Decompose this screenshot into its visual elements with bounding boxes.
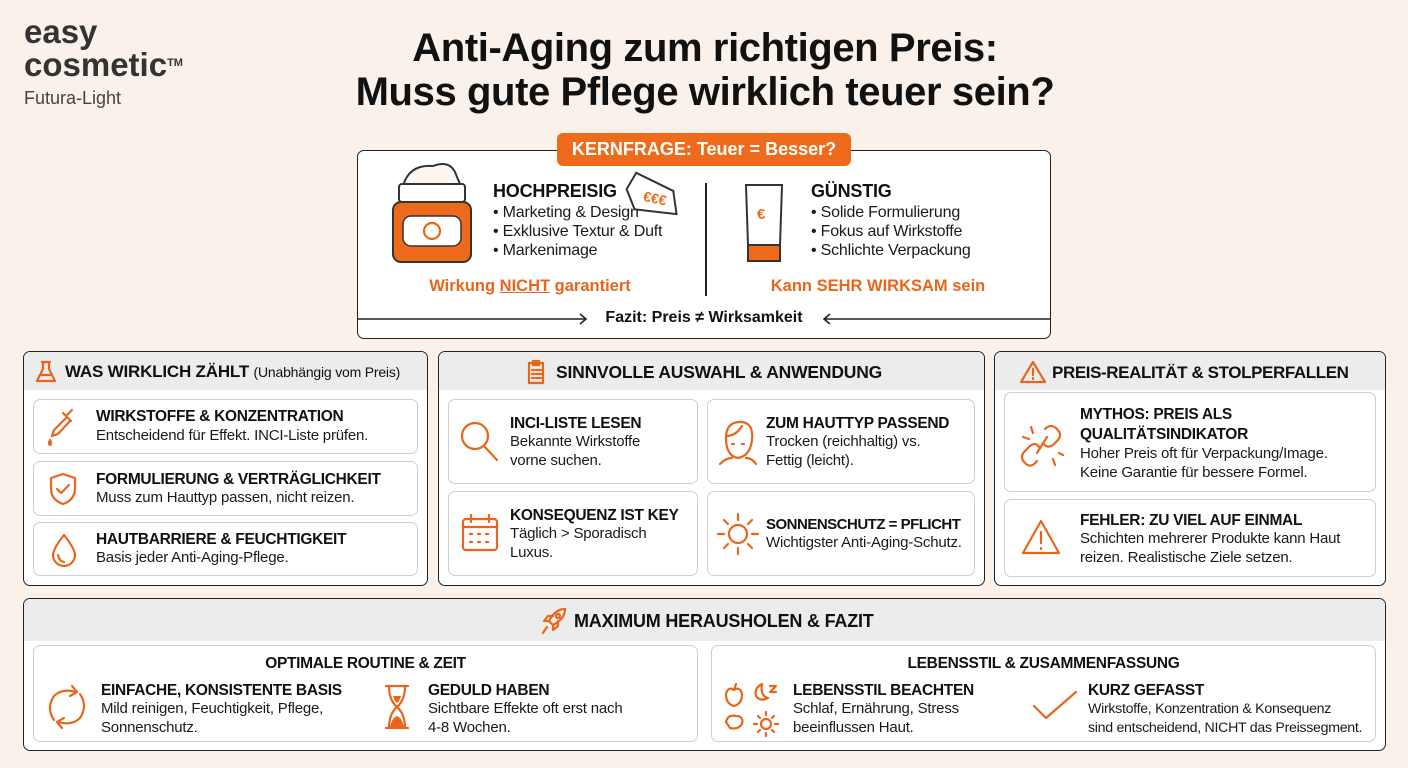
box: optimale routine: Sonnenschutz. <box>101 718 198 736</box>
card: mythos <box>1004 392 1376 492</box>
logo: Futura-Light <box>24 88 121 108</box>
box: lebensstil <box>711 645 1376 742</box>
card: hauttyp: ZUM HAUTTYP PASSEND <box>766 415 949 432</box>
card: hauttyp: Fettig (leicht). <box>766 452 854 468</box>
card: inci: Bekannte Wirkstoffe <box>510 433 640 450</box>
list: günstig: • Fokus auf Wirkstoffe <box>811 223 962 240</box>
panel: maximum herausholen <box>23 598 1386 751</box>
list: günstig <box>811 204 971 259</box>
card: hautbarriere: HAUTBARRIERE & FEUCHTIGKEIT <box>96 531 346 548</box>
card: sonnenschutz <box>707 491 975 576</box>
box: lebensstil: Wirkstoffe, Konzentration & Konsequenz <box>1088 701 1331 717</box>
card: sonnenschutz: SONNENSCHUTZ = PFLICHT <box>766 516 960 533</box>
list: hochpreisig: • Marketing & Design <box>493 204 639 221</box>
card: wirkstoffe: Entscheidend für Effekt. INCI-Liste prüfen. <box>96 427 368 444</box>
arrow: fazit: Fazit: Preis ≠ Wirksamkeit <box>605 309 803 326</box>
box: lebensstil: sind entscheidend, NICHT das Preissegment. <box>1088 720 1362 736</box>
icon: check <box>1032 690 1078 720</box>
card: hautbarriere <box>33 522 418 576</box>
list: hochpreisig: • Exklusive Textur & Duft <box>493 223 662 240</box>
icon: price tag <box>626 172 678 216</box>
box: optimale routine: OPTIMALE ROUTINE & ZEIT <box>265 655 466 672</box>
badge: kernfrage <box>557 133 851 166</box>
callout: kann sehr wirksam sein: Kann SEHR WIRKSAM sein <box>771 277 985 295</box>
card: inci: INCI-LISTE LESEN <box>510 415 641 432</box>
title: Anti-Aging zum richtigen Preis: <box>412 26 998 70</box>
card: konsequenz <box>448 491 698 576</box>
card: hauttyp: Trocken (reichhaltig) vs. <box>766 433 920 450</box>
card: formulierung: Muss zum Hauttyp passen, nicht reizen. <box>96 489 354 506</box>
box: optimale routine: GEDULD HABEN <box>428 682 549 699</box>
card: hauttyp <box>707 399 975 484</box>
card: konsequenz: Täglich > Sporadisch <box>510 525 646 542</box>
panel: kernfrage comparison <box>357 150 1051 339</box>
icon: rocket <box>542 608 566 634</box>
icon: price tag: €€€ <box>642 188 668 209</box>
card: fehler: reizen. Realistische Ziele setzen. <box>1080 548 1292 566</box>
card: sonnenschutz: Wichtigster Anti-Aging-Schutz. <box>766 534 962 551</box>
box: lebensstil: KURZ GEFASST <box>1088 682 1204 699</box>
icon: flask <box>36 360 56 382</box>
card: fehler <box>1004 499 1376 577</box>
card: formulierung <box>33 461 418 516</box>
arrow: fazit <box>358 309 1050 326</box>
box: optimale routine: Mild reinigen, Feuchtigkeit, Pflege, <box>101 700 323 717</box>
card: inci: vorne suchen. <box>510 452 602 468</box>
card: konsequenz: KONSEQUENZ IST KEY <box>510 507 679 524</box>
callout: wirkung nicht garantiert: Wirkung NICHT garantiert <box>429 277 631 295</box>
icon: cycle <box>48 684 86 730</box>
card: mythos: Keine Garantie für bessere Formel. <box>1080 464 1307 480</box>
card: formulierung: FORMULIERUNG & VERTRÄGLICHKEIT <box>96 471 381 488</box>
list: günstig: • Schlichte Verpackung <box>811 242 971 259</box>
card: fehler: FEHLER: ZU VIEL AUF EINMAL <box>1080 512 1302 529</box>
card: mythos: QUALITÄTSINDIKATOR <box>1080 426 1248 442</box>
title: Muss gute Pflege wirklich teuer sein? <box>356 70 1054 114</box>
card: fehler: Schichten mehrerer Produkte kann Haut <box>1080 530 1340 547</box>
list: günstig: • Solide Formulierung <box>811 204 960 221</box>
card: hautbarriere: Basis jeder Anti-Aging-Pflege. <box>96 549 288 566</box>
box: lebensstil: Schlaf, Ernährung, Stress <box>793 700 959 717</box>
card: wirkstoffe: WIRKSTOFFE & KONZENTRATION <box>96 408 343 425</box>
divider <box>705 183 707 296</box>
icon: clipboard <box>528 360 544 384</box>
box: optimale routine: Sichtbare Effekte oft erst nach <box>428 700 622 717</box>
heading: WAS WIRKLICH ZÄHLT (Unabhängig vom Preis) <box>65 362 400 381</box>
card: wirkstoffe <box>33 399 418 454</box>
box: lebensstil: LEBENSSTIL BEACHTEN <box>793 682 974 699</box>
heading: günstig: GÜNSTIG <box>811 181 892 201</box>
icon: tube: € <box>757 206 766 223</box>
panel: preis-realität <box>994 351 1386 586</box>
title <box>356 26 1054 114</box>
logo: cosmeticTM <box>24 46 183 83</box>
card: inci <box>448 399 698 484</box>
heading: PREIS-REALITÄT & STOLPERFALLEN <box>1052 363 1349 382</box>
card: konsequenz: Luxus. <box>510 544 553 560</box>
box: optimale routine <box>33 645 698 742</box>
list: hochpreisig <box>493 204 662 259</box>
box: lebensstil: beeinflussen Haut. <box>793 718 914 736</box>
badge: kernfrage: KERNFRAGE: Teuer = Besser? <box>572 139 836 159</box>
logo <box>24 13 183 108</box>
card: mythos: MYTHOS: PREIS ALS <box>1080 406 1232 423</box>
heading: MAXIMUM HERAUSHOLEN & FAZIT <box>574 611 874 631</box>
icon: lifestyle <box>724 682 780 738</box>
box: lebensstil: LEBENSSTIL & ZUSAMMENFASSUNG <box>907 655 1180 672</box>
panel: sinnvolle auswahl <box>438 351 985 586</box>
icon: hourglass <box>384 684 410 730</box>
icon: cream jar <box>392 163 472 263</box>
icon: tube <box>744 184 784 262</box>
panel: was wirklich zählt <box>23 351 428 586</box>
logo: easy <box>24 13 97 50</box>
card: mythos: Hoher Preis oft für Verpackung/Image. <box>1080 445 1328 462</box>
box: optimale routine: EINFACHE, KONSISTENTE BASIS <box>101 682 342 699</box>
heading: hochpreisig: HOCHPREISIG <box>493 181 617 201</box>
icon: warning <box>1020 360 1046 384</box>
list: hochpreisig: • Markenimage <box>493 242 597 259</box>
box: optimale routine: 4-8 Wochen. <box>428 718 511 736</box>
heading: SINNVOLLE AUSWAHL & ANWENDUNG <box>556 362 882 382</box>
